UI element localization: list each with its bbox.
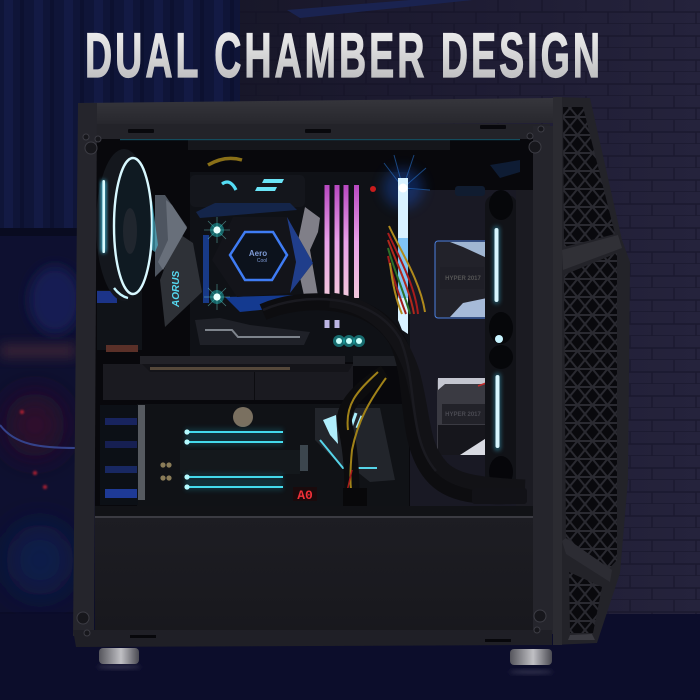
right cooling fans xyxy=(455,160,534,510)
feet xyxy=(97,648,553,674)
case frame xyxy=(73,98,553,647)
bottom rail xyxy=(73,630,552,647)
top inner rail xyxy=(80,124,550,139)
Aorus VRM heatsink xyxy=(152,195,202,327)
corner fasteners xyxy=(77,126,546,636)
CPU water block xyxy=(203,207,320,312)
power supply shroud xyxy=(95,506,539,632)
sleeved water cooling tubes xyxy=(263,299,527,504)
light bar VRM lower xyxy=(195,318,310,345)
24-pin motherboard cable xyxy=(388,226,425,314)
back plate xyxy=(410,190,520,515)
right addressable LED strip xyxy=(370,155,430,334)
left pillar xyxy=(73,103,97,636)
middle mesh xyxy=(564,253,617,572)
drive cage lights left xyxy=(100,405,145,505)
wall shelf xyxy=(287,0,473,18)
CPU water block: Cool xyxy=(257,258,267,264)
SSD top xyxy=(435,241,488,318)
motherboard lower xyxy=(137,404,409,506)
upper mesh xyxy=(563,107,615,247)
glowing LEDs xyxy=(204,217,365,347)
PCIe slots xyxy=(184,428,283,491)
Aorus eagle logo on chipset xyxy=(315,408,395,482)
right pillar xyxy=(533,126,553,634)
floor xyxy=(0,614,700,700)
GPU xyxy=(103,356,403,400)
POST code display: A0 xyxy=(297,488,313,503)
top VRM cover xyxy=(190,158,305,218)
SSD bottom: HYPER 2017 xyxy=(445,412,482,418)
lower rib xyxy=(562,538,612,582)
interior of main chamber xyxy=(95,135,539,632)
SSD top: HYPER 2017 xyxy=(445,276,482,282)
POST code display xyxy=(178,487,317,514)
poster xyxy=(0,228,81,612)
rib between meshes xyxy=(562,235,622,270)
Aorus VRM heatsink: AORUS xyxy=(171,271,182,308)
brick wall xyxy=(235,0,700,615)
SSD bottom xyxy=(437,378,489,455)
front panel xyxy=(553,97,630,645)
CPU water block: Aero xyxy=(249,249,267,258)
curtain xyxy=(0,0,240,228)
CPU fan xyxy=(96,149,152,301)
rear I/O shield xyxy=(97,290,142,352)
RAM modules xyxy=(324,185,359,328)
lower mesh xyxy=(569,572,602,633)
motherboard upper xyxy=(190,172,410,362)
top rail xyxy=(79,98,553,126)
GPU power cables xyxy=(343,372,386,518)
ventilated top strip xyxy=(188,140,450,150)
